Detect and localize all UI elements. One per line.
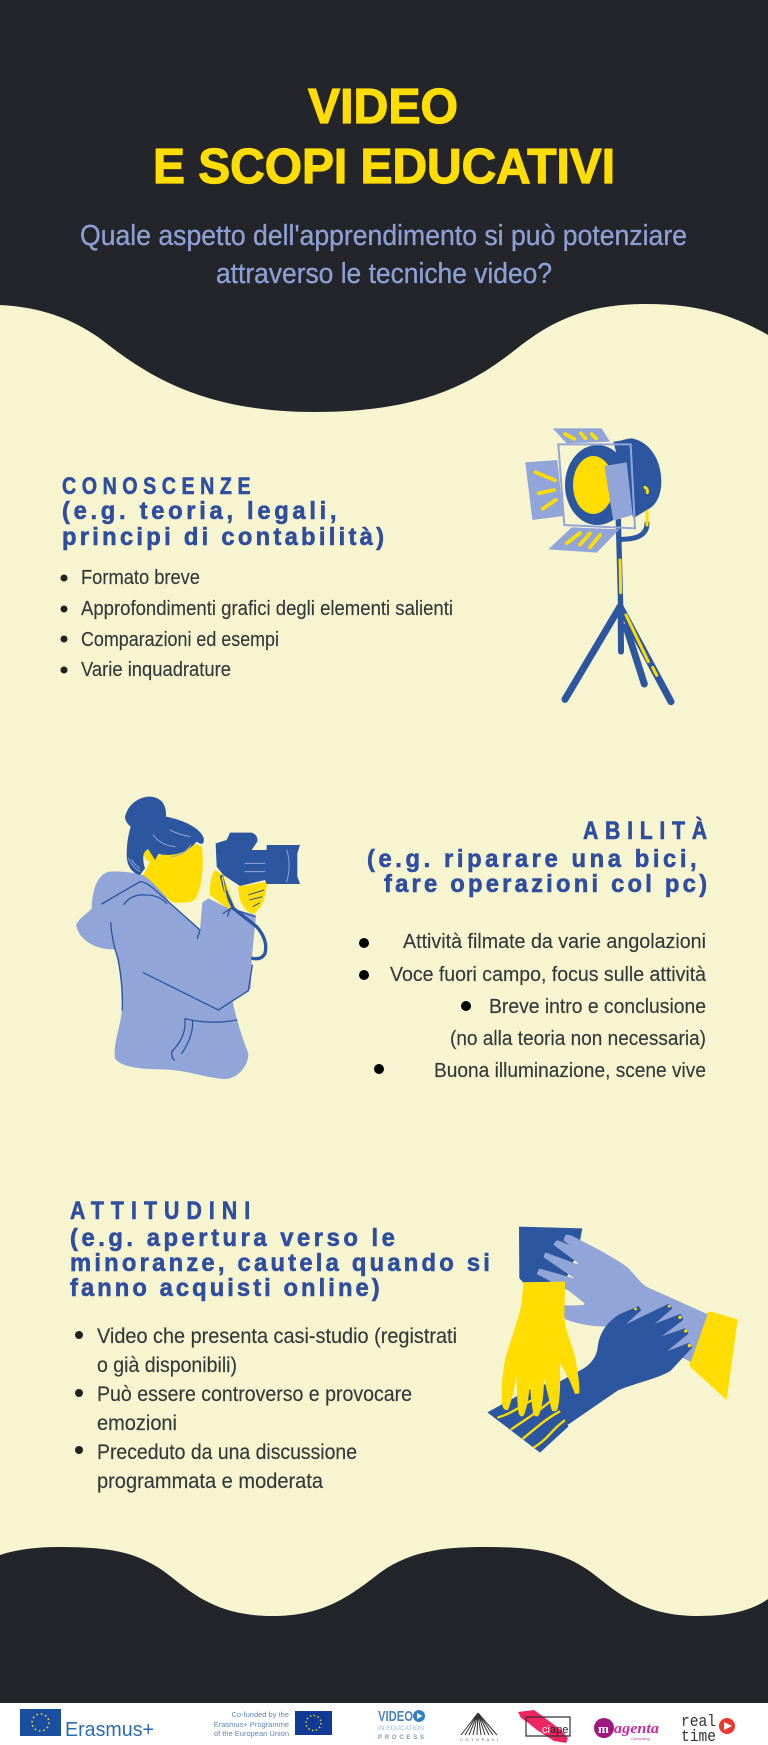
heading: conoscenze: principi di contabilità): [62, 523, 384, 551]
heading: abilità: [367, 815, 707, 898]
bullet list: conoscenze: Varie inquadrature: [81, 659, 231, 681]
heading: conoscenze: [62, 472, 384, 551]
heading: conoscenze: (e.g. teoria, legali,: [62, 497, 337, 525]
bullet list: attitudini: Video che presenta casi-studio (registrati: [97, 1325, 457, 1348]
bullet list: conoscenze: Comparazioni ed esempi: [81, 629, 279, 651]
logo: magenta: [594, 1718, 660, 1741]
bullet list: abilità: [359, 930, 707, 1082]
logo: ciape: ape: [550, 1724, 568, 1736]
logo: magenta: agenta: [614, 1721, 660, 1737]
bullet list: abilità: Attività filmate da varie angolazioni: [403, 930, 706, 953]
logo: magenta: Consulting: [631, 1736, 650, 1741]
bullet list: abilità: Buona illuminazione, scene vive: [434, 1059, 706, 1082]
bullet list: attitudini: emozioni: [97, 1412, 177, 1435]
bullet list: attitudini: Può essere controverso e provocare: [97, 1383, 412, 1406]
heading: conoscenze: CONOSCENZE: [62, 472, 251, 499]
bullet list: abilità: Voce fuori campo, focus sulle attività: [390, 963, 707, 986]
panel: abilità: [359, 815, 707, 1082]
icon: studio spotlight on tripod: [525, 428, 671, 702]
logo: cotopaxi: COTOPAXI: [460, 1737, 498, 1742]
heading: attitudini: minoranze, cautela quando si: [70, 1249, 490, 1277]
heading: abilità: ABILITÀ: [583, 815, 707, 844]
bullet list: abilità: (no alla teoria non necessaria): [450, 1027, 706, 1050]
panel: attitudini: [70, 1196, 490, 1493]
logo: co-funded by EU: of the European Union: [214, 1729, 289, 1738]
heading: attitudini: ATTITUDINI: [70, 1196, 250, 1224]
logo: video in education process: VIDEO: [378, 1708, 413, 1725]
logo: ciape: [518, 1710, 570, 1743]
bullet list: attitudini: o già disponibili): [97, 1354, 237, 1377]
bullet list: attitudini: [75, 1325, 457, 1493]
subtitle question: Quale aspetto dell'apprendimento si può potenziare: [80, 220, 687, 252]
logo: cotopaxi: [460, 1713, 498, 1742]
heading: abilità: fare operazioni col pc): [384, 870, 707, 898]
logo: video in education process: IN EDUCATION: [378, 1725, 424, 1732]
icon: three joined hands: [487, 1227, 738, 1453]
bottom dark wave: [0, 1547, 768, 1703]
subtitle question: [80, 220, 687, 290]
bullet list: attitudini: programmata e moderata: [97, 1470, 323, 1493]
bullet list: conoscenze: Formato breve: [81, 567, 200, 589]
heading: attitudini: (e.g. apertura verso le: [70, 1224, 395, 1252]
logo: erasmus plus: Erasmus+: [65, 1719, 154, 1741]
footer logos strip: [0, 1703, 768, 1745]
panel: conoscenze: [60, 472, 453, 681]
bullet list: abilità: Breve intro e conclusione: [489, 995, 706, 1018]
logo: co-funded by EU: Erasmus+ Programme: [214, 1720, 289, 1729]
logo: real time: real: [681, 1713, 716, 1732]
title: VIDEO: [308, 80, 458, 134]
logo: co-funded by EU: [214, 1710, 332, 1738]
logo: magenta: m: [598, 1721, 609, 1736]
top dark wave banner: [0, 0, 768, 412]
title: E SCOPI EDUCATIVI: [153, 140, 615, 194]
title: [153, 80, 615, 194]
logo: erasmus plus: [20, 1709, 154, 1741]
logo: video in education process: [378, 1708, 425, 1741]
logo: ciape: ci: [542, 1724, 550, 1736]
logo: co-funded by EU: Co-funded by the: [231, 1710, 289, 1719]
bullet list: conoscenze: [60, 567, 453, 681]
heading: attitudini: fanno acquisti online): [70, 1274, 380, 1302]
subtitle question: attraverso le tecniche video?: [216, 258, 552, 290]
logo: real time: [681, 1713, 735, 1745]
heading: abilità: (e.g. riparare una bici,: [367, 845, 697, 873]
heading: attitudini: [70, 1196, 490, 1302]
bullet list: attitudini: Preceduto da una discussione: [97, 1441, 357, 1464]
icon: photographer with camera: [76, 797, 300, 1079]
logo: video in education process: PROCESS: [378, 1735, 424, 1741]
bullet list: conoscenze: Approfondimenti grafici degli elementi salienti: [81, 598, 453, 620]
